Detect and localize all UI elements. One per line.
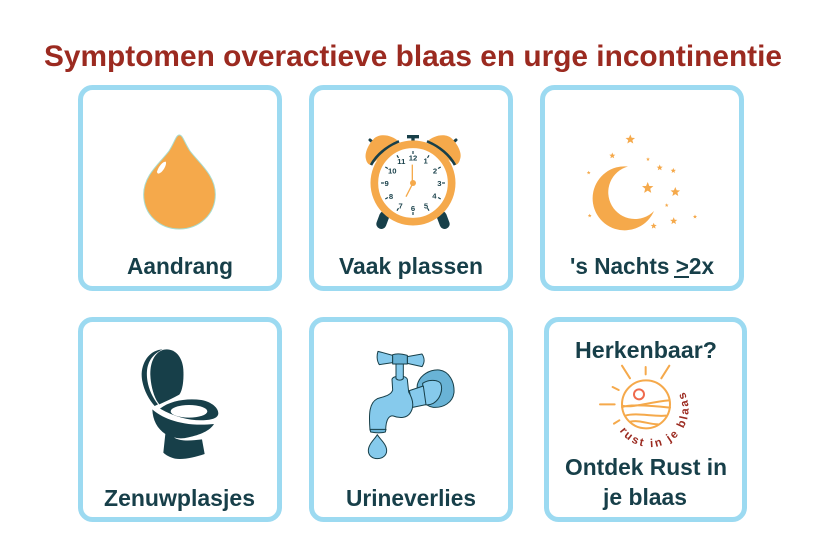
label: Urineverlies [346,485,476,511]
icon: alarm clock [366,135,461,224]
icon: logo [599,364,689,448]
title: Symptomen overactieve blaas en urge incontinentie [44,40,782,73]
icon: alarm clock: 6 [411,204,415,213]
logo text [620,380,689,447]
label: 's Nachts >2x [570,253,714,279]
label: Aandrang [127,253,233,279]
panel: 's Nachts [542,88,742,288]
icon: moon and stars [587,134,697,230]
panel: Vaak plassen [312,88,510,288]
icon: alarm clock: 10 [388,167,397,176]
call to action [565,454,727,510]
icon: alarm clock: 4 [432,191,437,200]
icon: alarm clock: 9 [385,179,389,188]
icon: tap [368,351,454,459]
icon: alarm clock: 7 [399,201,403,210]
call to action: Ontdek Rust in [565,454,727,480]
label: Zenuwplasjes [104,485,255,511]
panel: Herkenbaar [544,317,747,522]
icon: alarm clock: 5 [424,201,429,210]
heading: Herkenbaar? [575,337,717,363]
icon: alarm clock: 2 [433,167,437,176]
icon: drop [144,135,215,229]
icon: alarm clock: 12 [409,153,417,162]
panel: Urineverlies [312,320,510,520]
icon: alarm clock: 8 [389,192,394,201]
icon: alarm clock: 1 [424,157,429,166]
label: Vaak plassen [339,253,483,279]
call to action: je blaas [602,484,687,510]
panel: Zenuwplasjes [80,320,280,520]
icon: logo: rust in je blaas [620,392,689,448]
icon: alarm clock: 11 [397,157,406,166]
icon: toilet [142,349,218,459]
icon: alarm clock: 3 [437,179,441,188]
panel: Aandrang [80,88,280,288]
